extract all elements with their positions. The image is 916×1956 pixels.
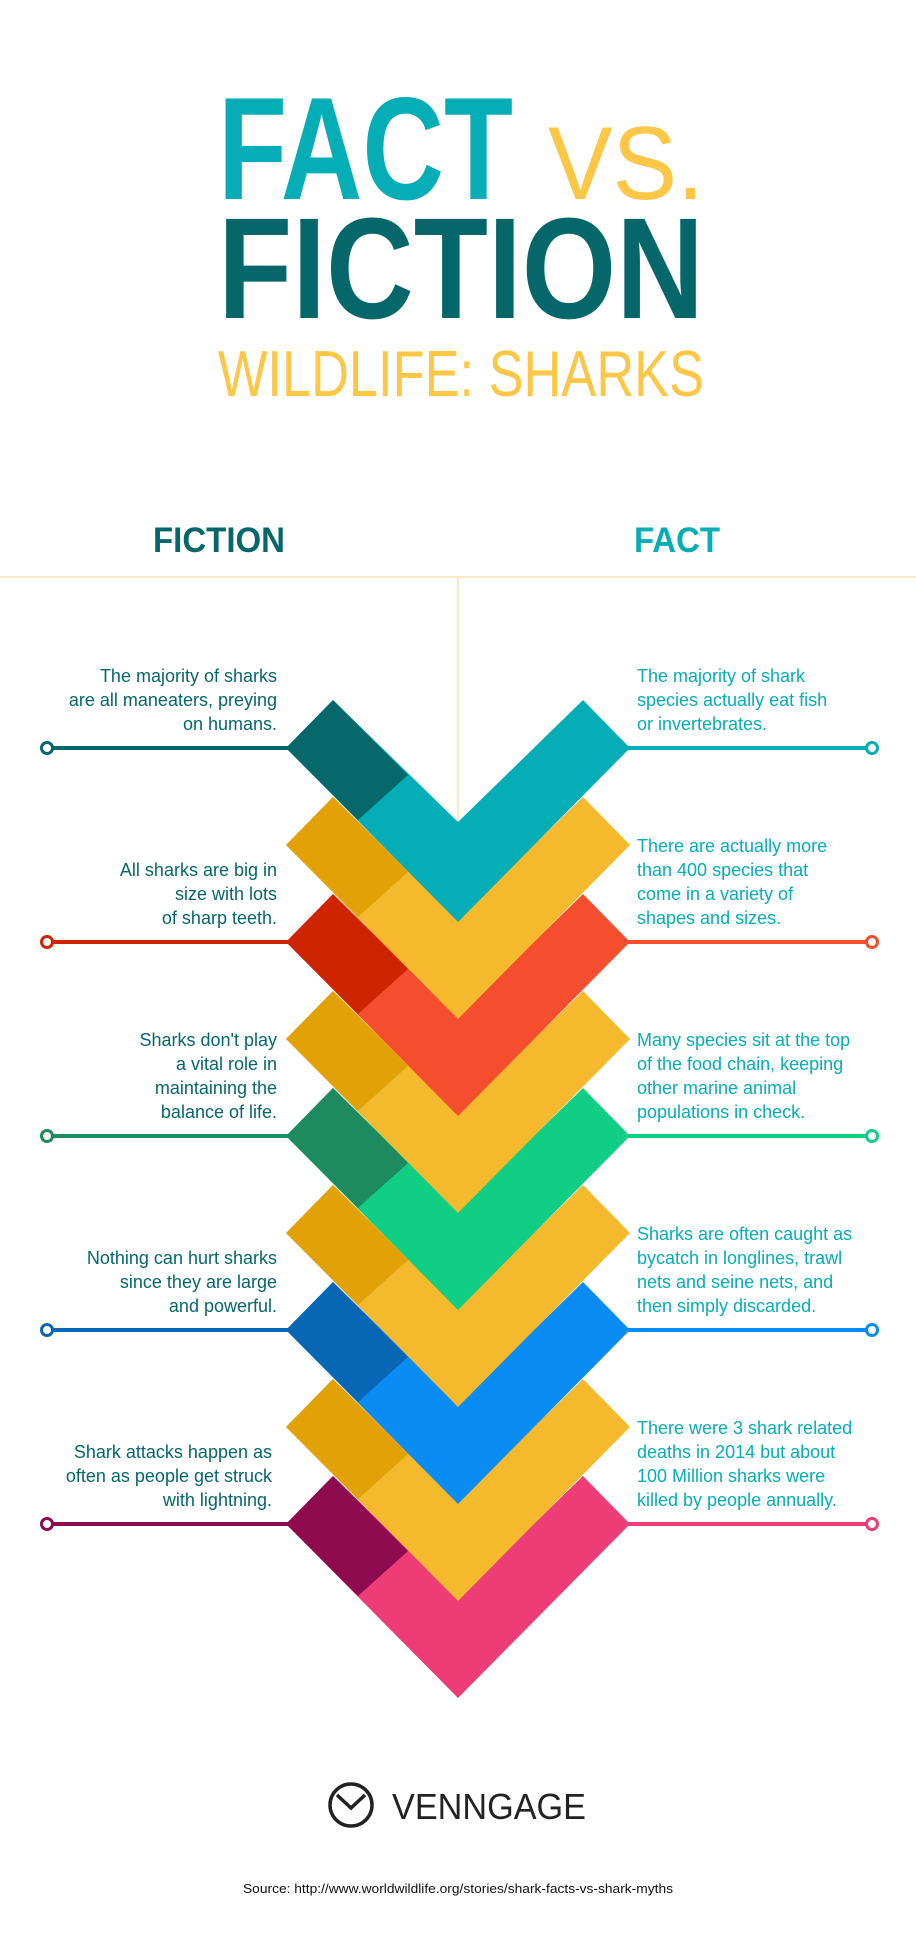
fiction text 2: All sharks are big in xyxy=(120,860,277,880)
chevron: yellow 3 xyxy=(286,1185,630,1407)
fiction text 3: maintaining the xyxy=(155,1078,277,1098)
fact text 4: Sharks are often caught as xyxy=(637,1224,852,1244)
chevron: pink xyxy=(286,1476,630,1698)
fact text 3: other marine animal xyxy=(637,1078,796,1098)
fact text 4: bycatch in longlines, trawl xyxy=(637,1248,842,1268)
fiction text 3: Sharks don't play xyxy=(139,1030,277,1050)
chevron: blue xyxy=(286,1282,630,1504)
fact text 4: nets and seine nets, and xyxy=(637,1272,833,1292)
fiction text 1: The majority of sharks xyxy=(100,666,277,686)
chevron: green xyxy=(286,1088,630,1310)
fiction text 3: a vital role in xyxy=(176,1054,277,1074)
source: Source: http://www.worldwildlife.org/stories/shark-facts-vs-shark-myths xyxy=(243,1881,674,1896)
fiction text 2: size with lots xyxy=(175,884,277,904)
subtitle: WILDLIFE: SHARKS xyxy=(218,337,704,410)
logo: VENNGAGE xyxy=(392,1786,586,1827)
title xyxy=(218,67,704,349)
fact text 5: deaths in 2014 but about xyxy=(637,1442,835,1462)
title: FACT xyxy=(218,67,513,230)
fact text 2: shapes and sizes. xyxy=(637,908,781,928)
fiction text 4: Nothing can hurt sharks xyxy=(87,1248,277,1268)
fiction text 4: since they are large xyxy=(120,1272,277,1292)
fact text 1: The majority of shark xyxy=(637,666,806,686)
fact text 3: Many species sit at the top xyxy=(637,1030,850,1050)
connector lines row 3 xyxy=(42,1130,878,1142)
fact text 1: or invertebrates. xyxy=(637,714,767,734)
fact text 5: killed by people annually. xyxy=(637,1490,837,1510)
fiction text 1: on humans. xyxy=(183,714,277,734)
chevron: teal xyxy=(286,700,630,922)
fact text 4: then simply discarded. xyxy=(637,1296,816,1316)
column heading: fiction: FICTION xyxy=(153,521,285,560)
chevron: yellow 2 xyxy=(286,991,630,1213)
fiction text 1: are all maneaters, preying xyxy=(69,690,277,710)
chevron: red xyxy=(286,894,630,1116)
fact text 2: than 400 species that xyxy=(637,860,808,880)
column heading: fact: FACT xyxy=(634,521,720,560)
fiction text 4: and powerful. xyxy=(169,1296,277,1316)
fiction text 5: often as people get struck xyxy=(66,1466,273,1486)
fact text 3: of the food chain, keeping xyxy=(637,1054,843,1074)
fact text 2: come in a variety of xyxy=(637,884,794,904)
connector lines row 5 xyxy=(42,1518,878,1530)
fact text 5: There were 3 shark related xyxy=(637,1418,852,1438)
connector lines row 1 xyxy=(42,742,878,754)
title: VS. xyxy=(548,106,704,222)
fact text 5: 100 Million sharks were xyxy=(637,1466,825,1486)
fiction text 2: of sharp teeth. xyxy=(162,908,277,928)
fiction text 5: Shark attacks happen as xyxy=(74,1442,272,1462)
fiction text 5: with lightning. xyxy=(162,1490,272,1510)
chevron: yellow 4 xyxy=(286,1379,630,1601)
fact text 3: populations in check. xyxy=(637,1102,805,1122)
connector lines row 2 xyxy=(42,936,878,948)
logo xyxy=(330,1784,586,1827)
chevron: yellow 1 xyxy=(286,797,630,1019)
connector lines row 4 xyxy=(42,1324,878,1336)
icon: venngage mark xyxy=(330,1784,372,1826)
title: FICTION xyxy=(218,188,704,349)
fiction text 3: balance of life. xyxy=(161,1102,277,1122)
chevron stack xyxy=(286,700,630,1698)
fact text 1: species actually eat fish xyxy=(637,690,827,710)
fact text 2: There are actually more xyxy=(637,836,827,856)
